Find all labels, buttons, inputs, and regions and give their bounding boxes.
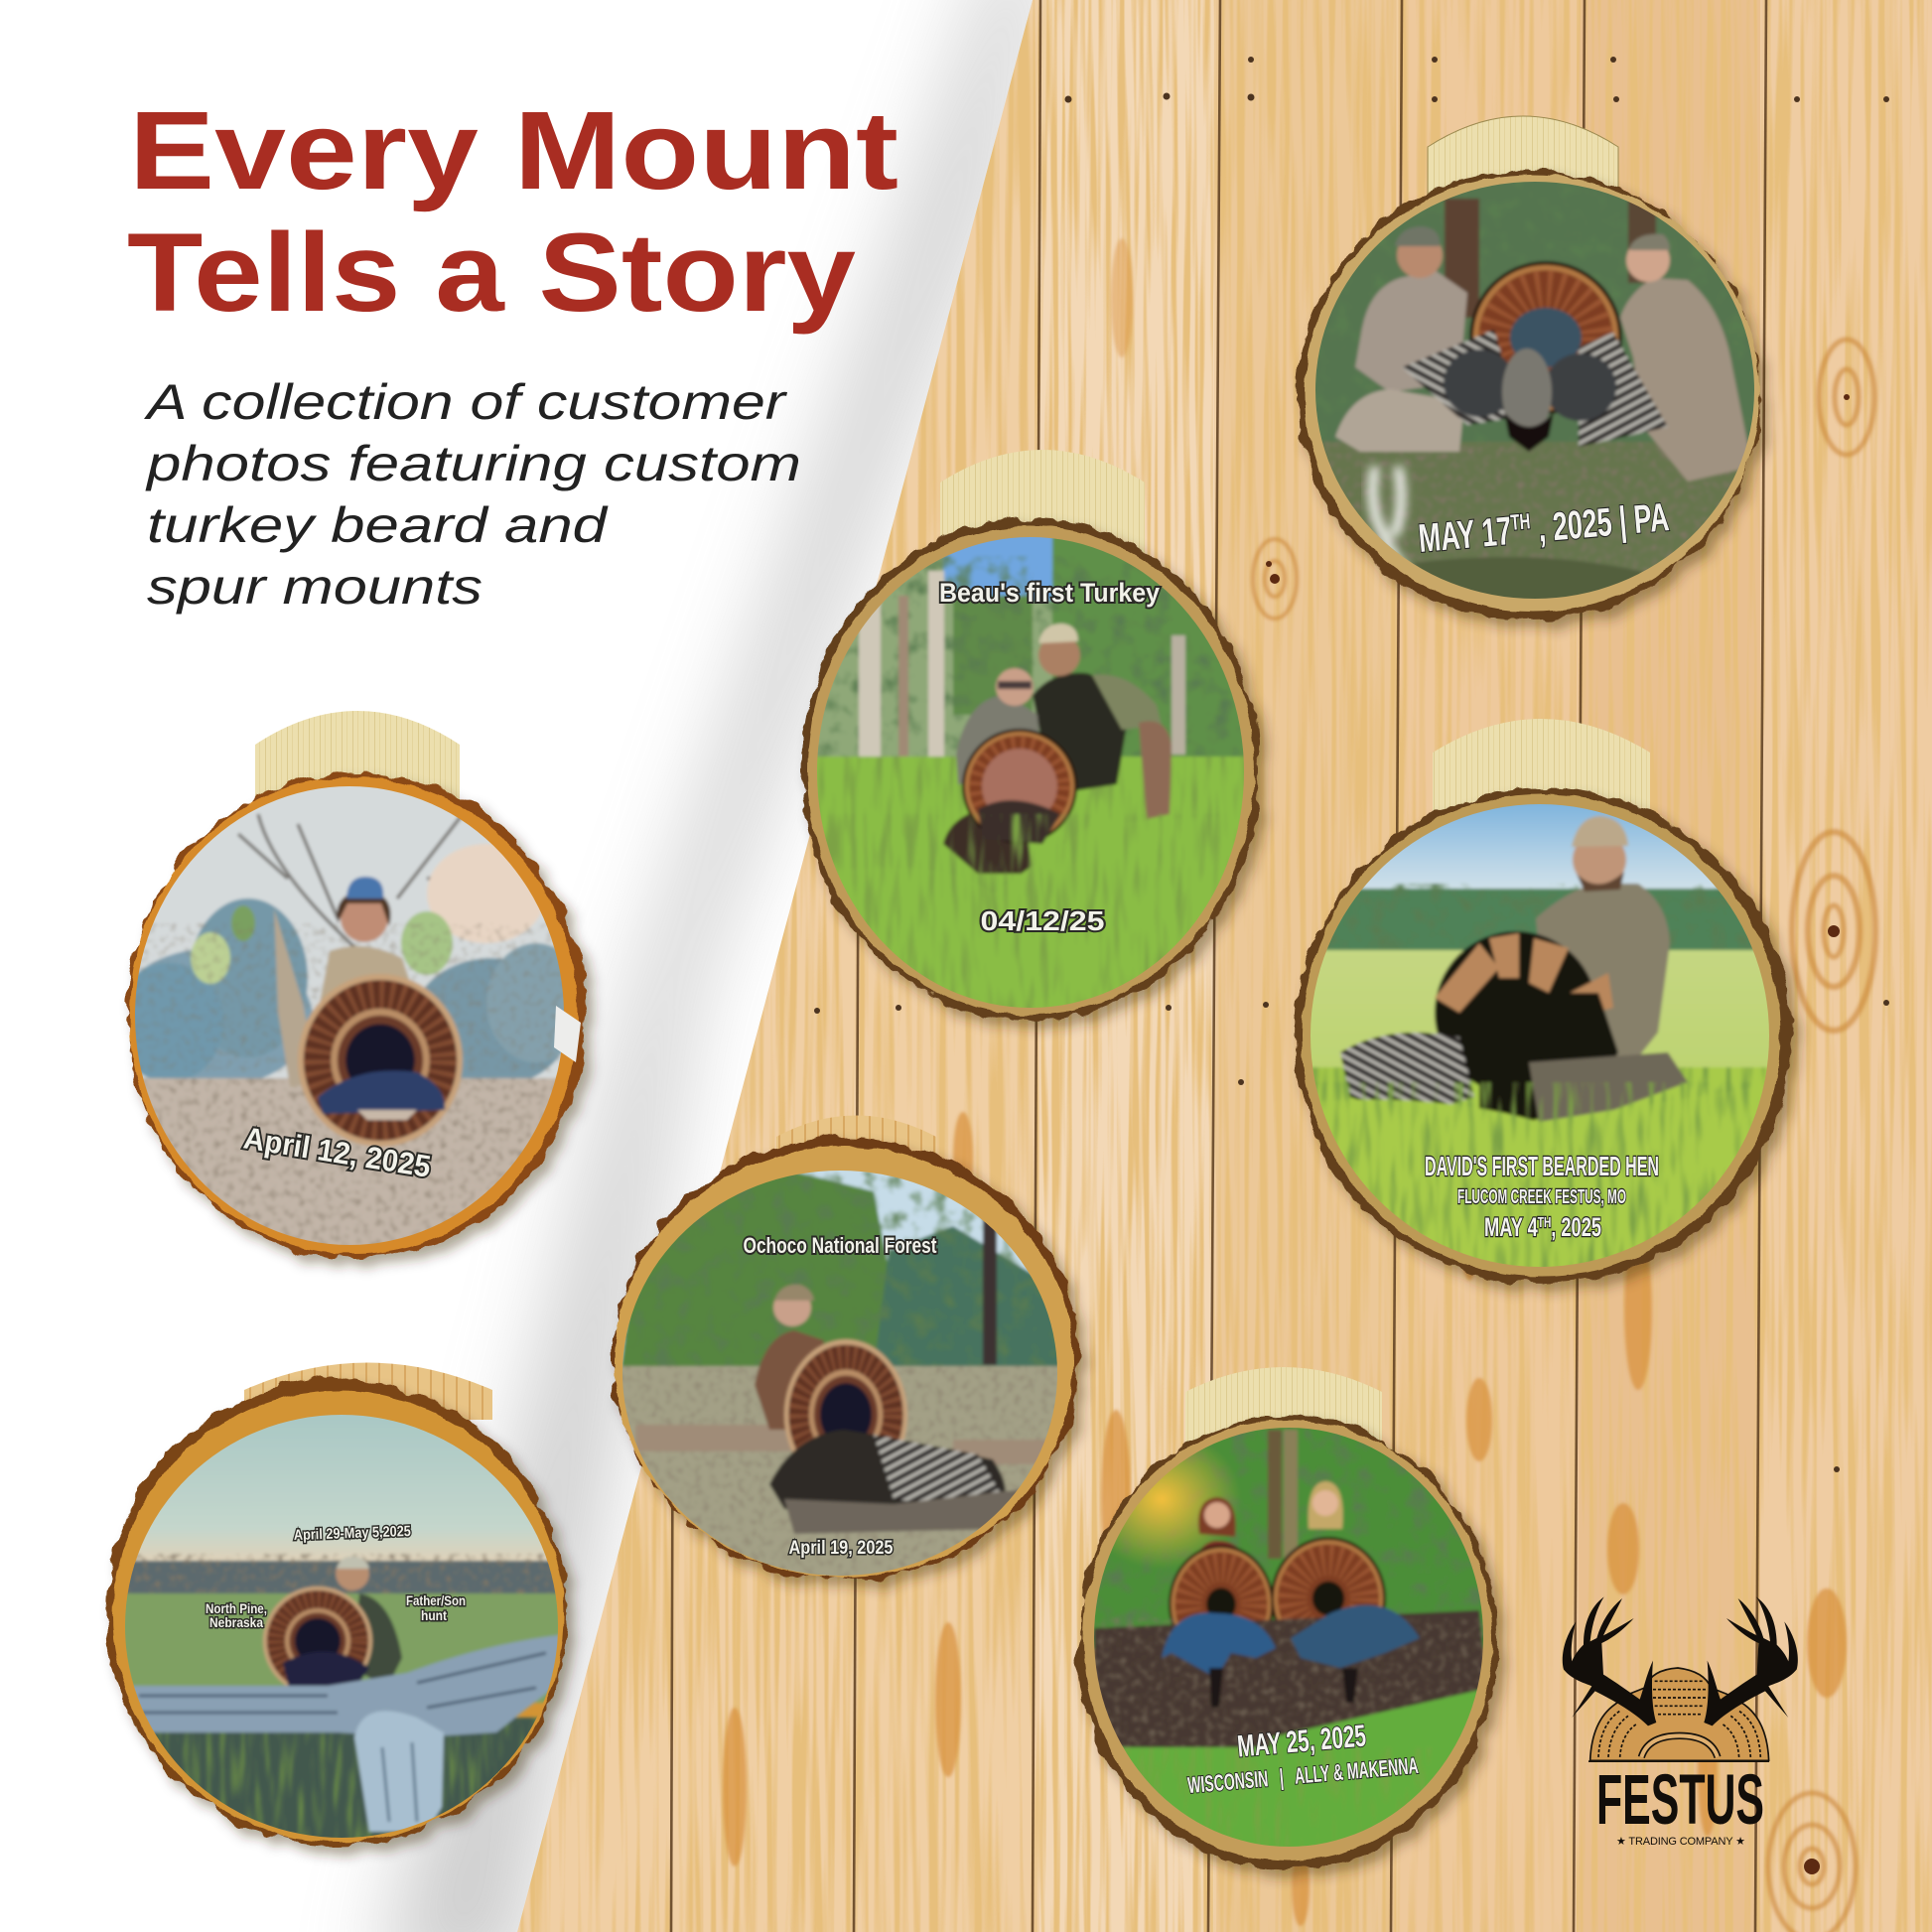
captions: North Pine, (206, 1600, 267, 1616)
date caption: TH (1509, 508, 1531, 535)
mount: North Pine, Nebraska (106, 1362, 567, 1846)
hanging tab (1428, 116, 1618, 199)
mount: Wisconsin, Ally and Makenna (1077, 1367, 1498, 1870)
date caption: , 2025 | PA (1529, 495, 1671, 551)
sapwood ring (807, 526, 1254, 1015)
sapwood ring (1305, 175, 1759, 612)
captions (1186, 1718, 1419, 1798)
title: Tells a Story (127, 210, 856, 335)
caption stack: DAVID'S FIRST BEARDED HEN (1425, 1151, 1659, 1181)
photo: hunter in forest (616, 1162, 1082, 1580)
subtitle text block: turkey beard and (147, 497, 610, 553)
photo: hunter in green field (1301, 794, 1787, 1278)
mount: David's first bearded hen (1295, 719, 1791, 1284)
mount: Beau's first Turkey (801, 450, 1260, 1021)
subtitle text block: A collection of customer (143, 374, 788, 430)
photo: two hunters with turkey (1311, 179, 1767, 616)
wordmark: FESTUS (1596, 1761, 1764, 1840)
hanging tab (776, 1116, 936, 1172)
logo: Festus Trading Company (1563, 1596, 1798, 1848)
date caption: MAY 17 (1417, 505, 1559, 561)
caption stack: MAY 4 (1484, 1212, 1564, 1242)
top caption: Ochoco National Forest (743, 1233, 937, 1258)
glue highlight (554, 1006, 581, 1062)
bark ring (106, 1379, 567, 1846)
top caption: Beau's first Turkey (939, 578, 1160, 608)
captions: WISCONSIN | ALLY & MAKENNA (1186, 1752, 1419, 1798)
bark ring (801, 518, 1260, 1021)
white diagonal panel (0, 0, 1052, 1932)
mount: May 17th 2025 PA (1298, 116, 1767, 620)
sapwood ring (615, 1147, 1073, 1578)
title: Every Mount (129, 88, 898, 212)
subtitle text block (143, 374, 801, 615)
caption stack: FLUCOM CREEK FESTUS, MO (1457, 1186, 1626, 1208)
mount: April 12, 2025 (114, 711, 586, 1259)
bark ring (613, 1138, 1079, 1581)
subtitle text block: spur mounts (147, 559, 483, 615)
icon: antlers and turkey fan (1563, 1596, 1798, 1762)
date caption: April 12, 2025 (241, 1120, 433, 1184)
bark ring (1077, 1416, 1498, 1870)
bark ring (1298, 171, 1760, 620)
tagline: ★ TRADING COMPANY ★ (1616, 1836, 1745, 1848)
photo: father and child in grass (809, 531, 1256, 1015)
captions: MAY 25, 2025 (1236, 1718, 1367, 1764)
mount: Ochoco National Forest (613, 1116, 1082, 1581)
captions: Nebraska (209, 1614, 263, 1630)
caption stack: , 2025 (1551, 1212, 1601, 1242)
photo: hunter with cactus (135, 786, 564, 1245)
captions: April 29-May 5,2025 (294, 1523, 411, 1544)
subtitle text block: photos featuring custom (145, 436, 801, 491)
bark ring (127, 772, 586, 1259)
date caption: 04/12/25 (981, 905, 1104, 936)
sapwood ring (129, 777, 578, 1254)
hanging tab (255, 711, 460, 804)
captions: hunt (421, 1607, 447, 1623)
sapwood ring (113, 1391, 564, 1842)
hanging tab (1185, 1367, 1382, 1449)
sapwood ring (1083, 1420, 1492, 1861)
captions (206, 1523, 466, 1630)
hanging tab (244, 1362, 492, 1420)
caption stack: TH (1538, 1214, 1551, 1231)
captions: Father/Son (406, 1592, 466, 1608)
hanging tab (1433, 719, 1650, 814)
photo: hunter on log at dusk (109, 1410, 566, 1842)
photo: two women with turkeys (1082, 1420, 1494, 1857)
hanging tab (940, 450, 1145, 556)
date caption: April 19, 2025 (788, 1538, 894, 1559)
title (127, 88, 898, 335)
bark ring (1295, 787, 1791, 1284)
sapwood ring (1302, 794, 1780, 1277)
caption stack (1425, 1151, 1659, 1242)
